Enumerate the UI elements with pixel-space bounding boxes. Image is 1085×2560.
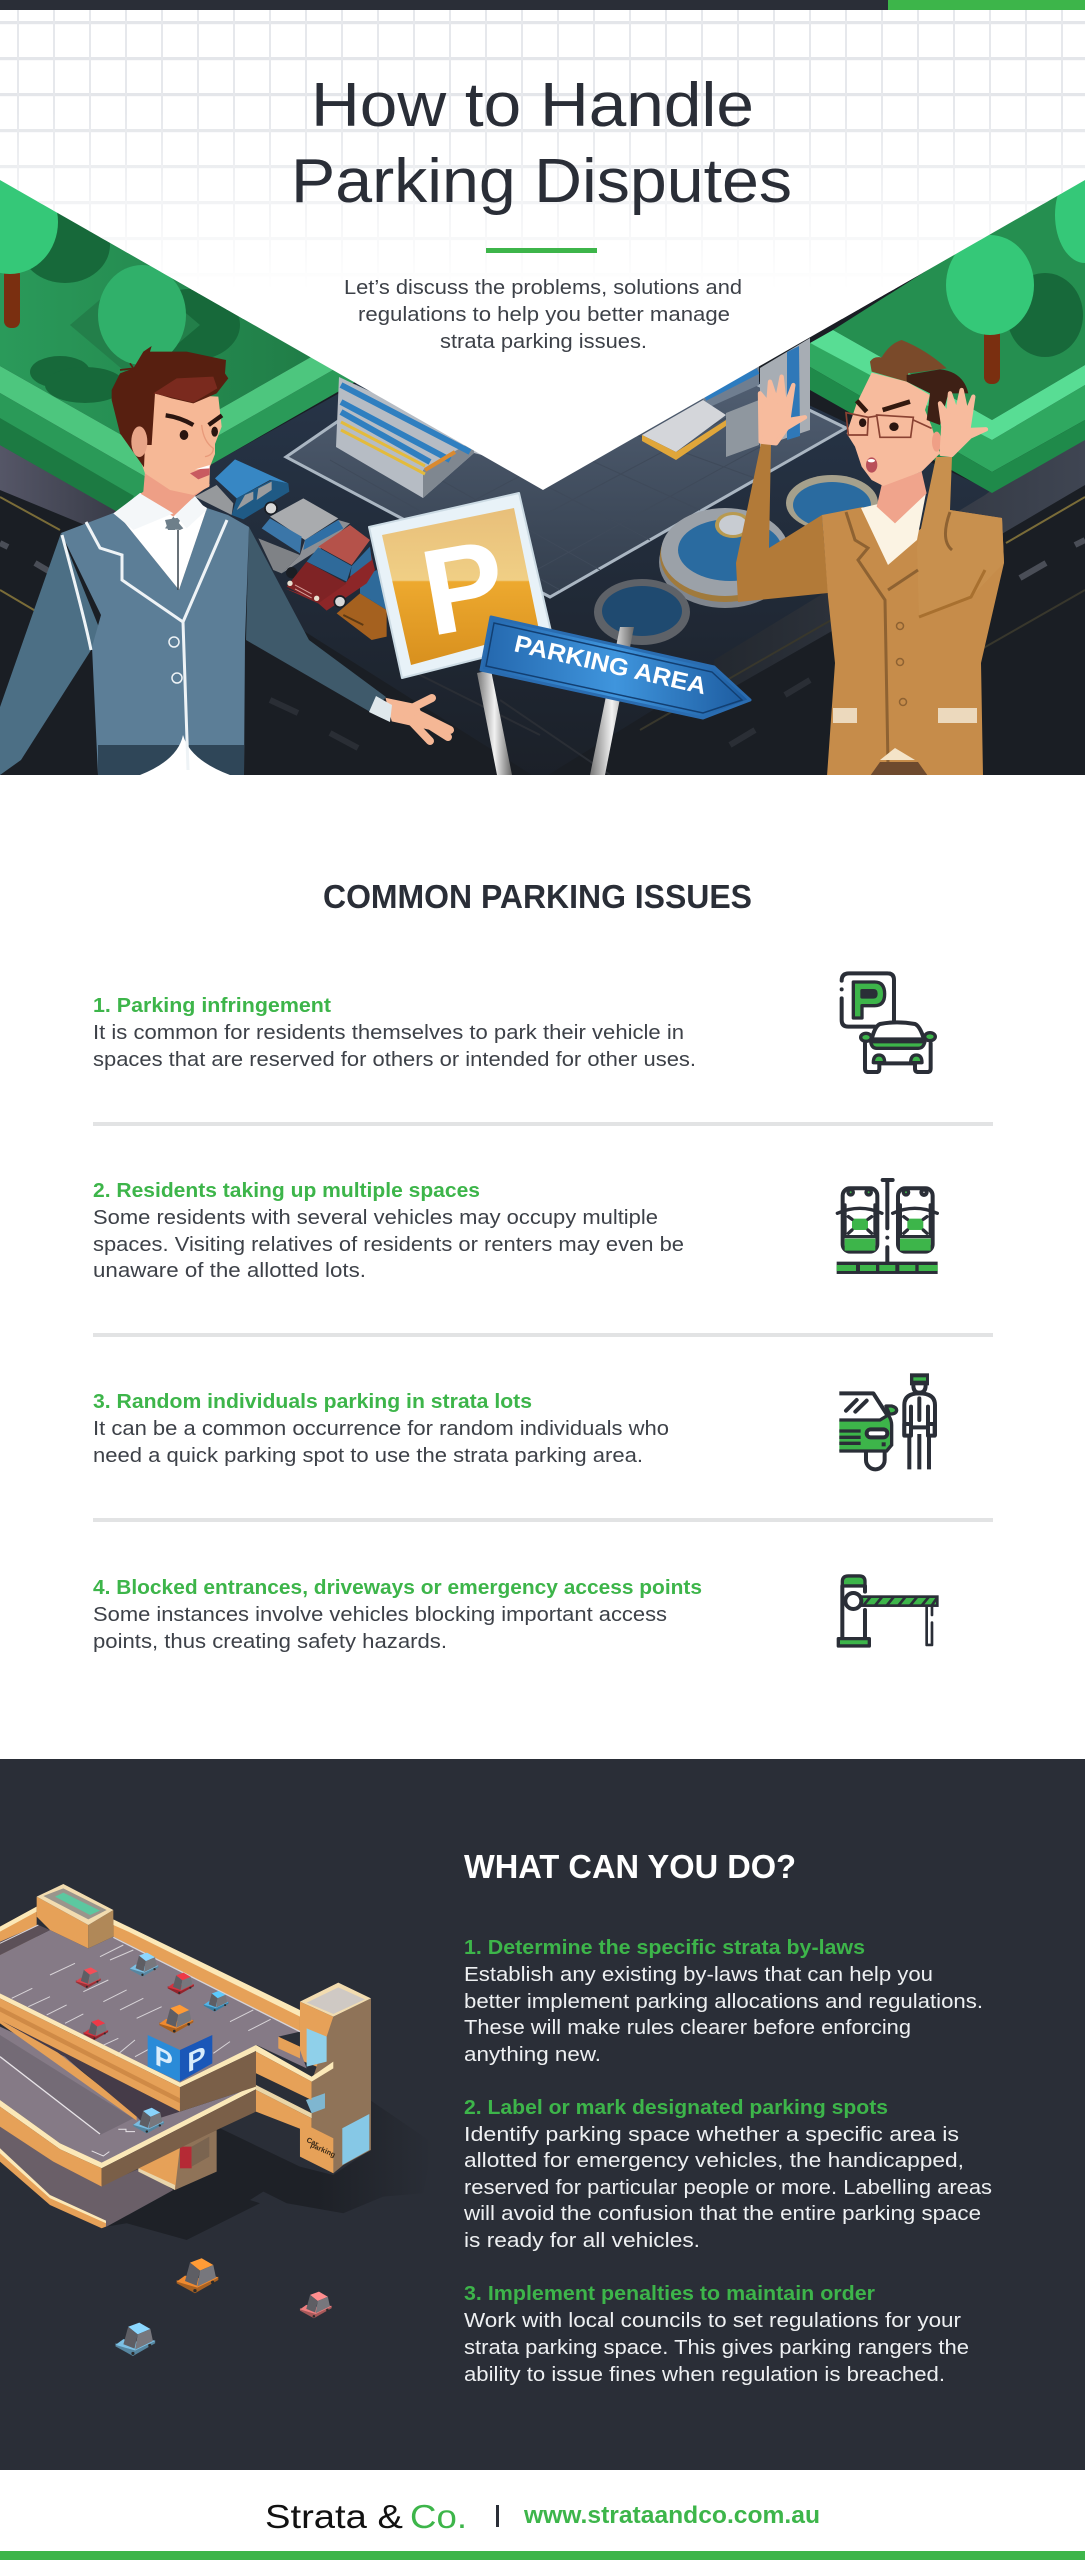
icon: car and attendant — [839, 1373, 935, 1469]
face — [847, 373, 940, 486]
cast shadow — [107, 2100, 433, 2240]
intro text: strata parking issues. — [440, 331, 647, 353]
P cube: P — [155, 2040, 173, 2079]
white chevron behind header text — [0, 10, 1085, 490]
shirt — [861, 493, 926, 565]
jacket body — [822, 507, 1004, 776]
buttons — [169, 637, 179, 647]
shirt and trouser hem — [880, 748, 915, 760]
divider — [93, 1518, 993, 1522]
dark section: what can you do — [0, 1759, 1085, 2470]
left building — [336, 377, 482, 498]
solution 2: allotted for emergency vehicles, the handicapped, — [464, 2150, 964, 2172]
intro text — [344, 277, 742, 353]
P cube — [148, 2035, 212, 2082]
rear wall — [0, 1907, 300, 2032]
solution 2: Identify parking space whether a specific area is — [464, 2124, 959, 2146]
issue 1: 1. Parking infringement — [93, 995, 331, 1017]
ear — [932, 432, 941, 452]
raised right arm — [917, 457, 1004, 617]
solution 1: These will make rules clearer before enforcing — [464, 2017, 911, 2039]
parking lot ground — [195, 382, 990, 730]
left man — [0, 346, 450, 775]
left park — [0, 170, 355, 515]
roof block — [37, 1884, 113, 1948]
issue 3: need a quick parking spot to use the strata parking area. — [93, 1445, 643, 1467]
mouth — [866, 457, 877, 473]
nose — [202, 425, 213, 457]
P parking sign — [369, 493, 553, 678]
tree crown — [0, 170, 58, 274]
solution 1: 1. Determine the specific strata by-laws — [464, 1937, 865, 1959]
left sleeve — [0, 533, 100, 775]
icon: two cars in bays — [837, 1180, 938, 1274]
parking area sign: PARKING AREA — [512, 631, 709, 700]
issue 2: spaces. Visiting relatives of residents or renters may even be — [93, 1234, 684, 1256]
issue 3: 3. Random individuals parking in strata lots — [93, 1391, 532, 1413]
buttons — [896, 622, 904, 630]
heading: what can you do: WHAT CAN YOU DO? — [464, 1848, 796, 1885]
footer separator — [496, 2505, 499, 2527]
P cube: P — [187, 2040, 206, 2079]
neck — [140, 472, 210, 517]
hair — [870, 340, 947, 382]
street cars — [115, 2258, 332, 2356]
torso — [61, 508, 249, 775]
title: Parking Disputes — [291, 147, 792, 216]
road ground — [0, 268, 1085, 775]
right park — [810, 167, 1085, 493]
neck — [877, 472, 927, 523]
orange car — [337, 570, 390, 640]
road markings — [0, 497, 1085, 775]
right tree — [1007, 273, 1083, 357]
jacket hem — [98, 745, 244, 775]
lapels — [62, 520, 227, 770]
title — [291, 71, 792, 216]
issue 3: It can be a common occurrence for random individuals who — [93, 1418, 669, 1440]
intro text: regulations to help you better manage — [358, 304, 730, 326]
raised left arm — [736, 443, 828, 602]
issue 4: points, thus creating safety hazards. — [93, 1631, 447, 1653]
eyebrows — [857, 401, 910, 412]
head — [112, 346, 228, 530]
solution 2: reserved for particular people or more. Labelling areas — [464, 2177, 992, 2199]
footer logo — [265, 2498, 467, 2535]
parking area sign — [481, 617, 750, 718]
solution 2: 2. Label or mark designated parking spots — [464, 2097, 888, 2119]
right sidewalk — [719, 440, 1085, 686]
header grid background — [0, 10, 1085, 319]
tree trunk — [4, 268, 20, 328]
issue 2: 2. Residents taking up multiple spaces — [93, 1180, 480, 1202]
heading: common parking issues: COMMON PARKING ISSUES — [323, 878, 752, 915]
tower: parking — [309, 2140, 337, 2159]
issue 2: unaware of the allotted lots. — [93, 1260, 366, 1282]
solution 3 — [464, 2283, 969, 2386]
face — [133, 393, 222, 495]
left sidewalk — [0, 445, 133, 533]
solution 1: better implement parking allocations and regulations. — [464, 1991, 983, 2013]
second tree crown — [70, 300, 200, 372]
upper deck front wall — [0, 1993, 333, 2112]
jacket seams — [846, 512, 952, 765]
issue 1 — [93, 995, 696, 1071]
illustration: isometric car park — [0, 1884, 433, 2356]
solution 2: is ready for all vehicles. — [464, 2230, 700, 2252]
parking sign poles — [477, 627, 634, 775]
grey car — [258, 498, 350, 578]
title underline — [486, 248, 597, 253]
bottom accent bar — [0, 2551, 1085, 2560]
tower — [300, 1983, 371, 2173]
divider — [93, 1333, 993, 1337]
tie hint — [165, 518, 180, 530]
eyes — [859, 418, 866, 427]
hand — [391, 698, 450, 741]
parked cars — [195, 459, 390, 640]
right sleeve — [246, 527, 386, 713]
left hand — [760, 377, 805, 443]
hero illustration — [0, 167, 1085, 780]
divider — [93, 1122, 993, 1126]
icon: boom barrier — [838, 1576, 937, 1646]
eyes — [180, 430, 188, 440]
pocket flaps — [833, 708, 857, 723]
issue 1: spaces that are reserved for others or intended for other uses. — [93, 1049, 696, 1071]
solution 3: 3. Implement penalties to maintain order — [464, 2283, 875, 2305]
glasses — [846, 413, 932, 437]
footer logo: Strata & — [265, 2498, 403, 2535]
collar — [113, 493, 173, 530]
intro text: Let’s discuss the problems, solutions and — [344, 277, 742, 299]
mouth — [190, 465, 210, 479]
footer logo: Co. — [410, 2498, 467, 2535]
footer website: www.strataandco.com.au — [523, 2502, 820, 2529]
P parking sign: P — [412, 514, 516, 662]
middle deck — [0, 2007, 333, 2187]
tree shadows — [30, 212, 110, 283]
ear — [131, 426, 147, 457]
issue 2: Some residents with several vehicles may occupy multiple — [93, 1207, 658, 1229]
solution 3: Work with local councils to set regulations for your — [464, 2310, 961, 2332]
issue 4: Some instances involve vehicles blocking important access — [93, 1604, 667, 1626]
issue 4: 4. Blocked entrances, driveways or emergency access points — [93, 1577, 702, 1599]
plaza — [283, 384, 848, 599]
upper deck — [0, 1925, 307, 2087]
eyebrows — [166, 415, 222, 425]
blue car — [195, 459, 289, 519]
fountains — [594, 475, 878, 645]
dark underside — [0, 2020, 180, 2123]
solution 3: strata parking space. This gives parking rangers the — [464, 2337, 969, 2359]
right man — [736, 340, 1004, 776]
right building — [642, 338, 810, 460]
support column — [138, 2130, 217, 2190]
issue 3 — [93, 1391, 669, 1467]
issue 1: It is common for residents themselves to park their vehicle in — [93, 1022, 684, 1044]
icon: parking sign and car — [840, 973, 935, 1072]
parked cars — [76, 1953, 228, 2134]
solution 1: anything new. — [464, 2044, 601, 2066]
solution 2: will avoid the confusion that the entire parking space — [463, 2203, 981, 2225]
shirt — [116, 493, 207, 590]
solution 3: ability to issue fines when regulation is breached. — [464, 2364, 945, 2386]
right hand — [940, 390, 986, 455]
solution 1: Establish any existing by-laws that can help you — [464, 1964, 933, 1986]
solution 1 — [464, 1937, 983, 2066]
tower: Car — [305, 2135, 320, 2148]
head — [760, 340, 986, 523]
issue 4 — [93, 1577, 702, 1653]
hair — [112, 346, 228, 467]
lowest ramp — [0, 2120, 173, 2228]
top accent bar — [0, 0, 1085, 10]
red car — [285, 525, 375, 611]
issue 2 — [93, 1180, 684, 1282]
title: How to Handle — [311, 71, 754, 140]
solution 2 — [463, 2097, 992, 2252]
